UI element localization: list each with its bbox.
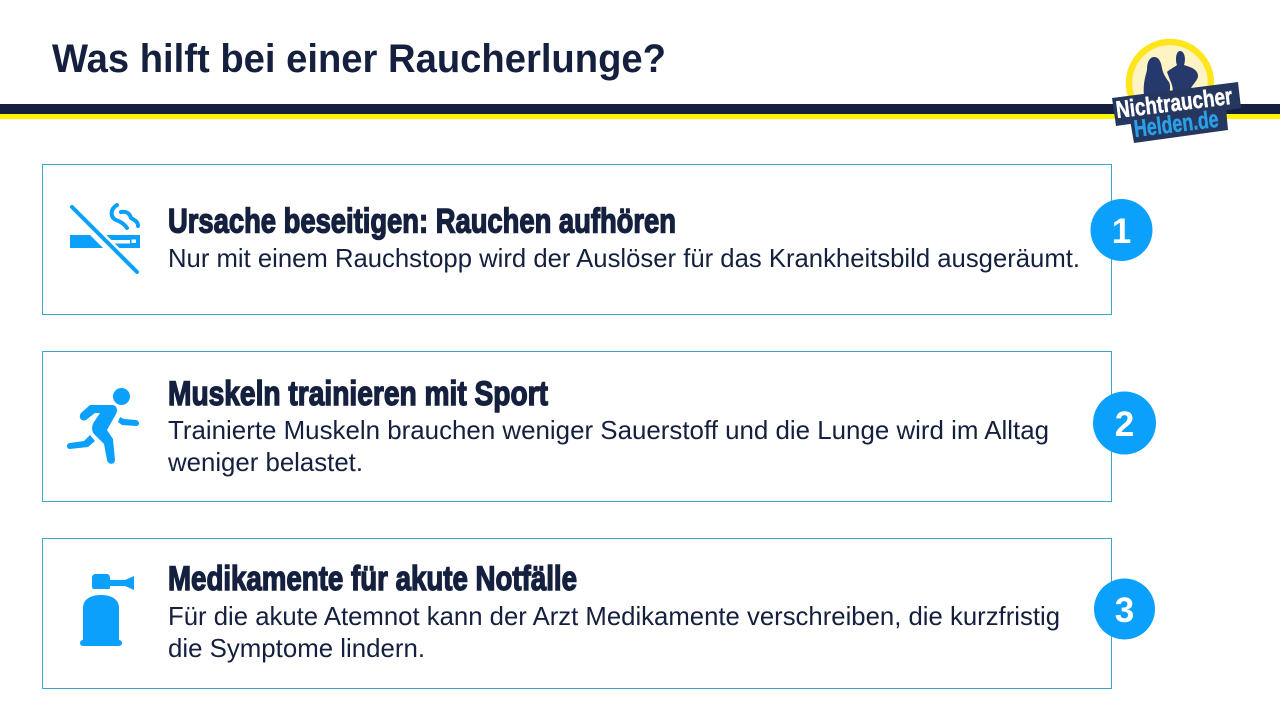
panel: Muskeln trainieren	[42, 352, 1112, 502]
icon: inhaler	[80, 574, 134, 646]
panel: Medikamente: die Symptome lindern.	[168, 633, 425, 663]
logo: Nichtraucher Helden	[1112, 42, 1241, 143]
number badge 1	[1090, 199, 1152, 261]
panel: Muskeln trainieren: weniger belastet.	[167, 447, 363, 477]
icon: no smoking	[70, 205, 140, 272]
text block: Für die akute Atemnot kann der Arzt Medikamente verschreiben, die kurzfristig	[168, 601, 1060, 631]
logo wordmark	[1114, 83, 1234, 143]
heading: Ursache beseitigen: Rauchen aufhören	[168, 202, 676, 240]
number badge 2: 2	[1115, 405, 1134, 444]
title: Was hilft bei einer Raucherlunge?	[52, 37, 666, 81]
number badge 2	[1093, 392, 1156, 454]
heading: Medikamente für akute Notfälle	[168, 560, 577, 598]
logo wordmark: Helden.de	[1132, 106, 1220, 143]
panel: Ursache beseitigen	[42, 164, 1112, 314]
logo wordmark: Nichtraucher	[1114, 83, 1234, 124]
icon: runner	[67, 388, 139, 464]
heading: Muskeln trainieren mit Sport	[168, 375, 548, 413]
panel: Medikamente	[42, 538, 1112, 688]
text block: Nur mit einem Rauchstopp wird der Auslöser für das Krankheitsbild ausgeräumt.	[168, 243, 1080, 273]
number badge 3	[1094, 578, 1155, 640]
number badge 1: 1	[1112, 212, 1131, 251]
header bar	[0, 104, 1280, 119]
text block: Trainierte Muskeln brauchen weniger Sauerstoff und die Lunge wird im Alltag	[168, 415, 1049, 445]
number badge 3: 3	[1115, 591, 1134, 630]
